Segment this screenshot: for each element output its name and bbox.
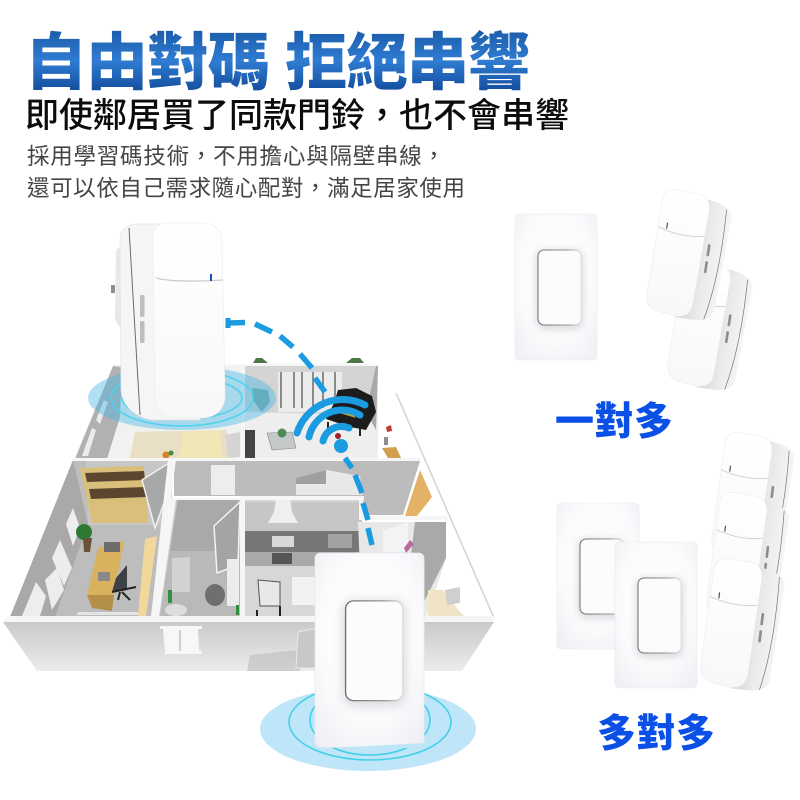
title: 自由對碼 拒絕串響 [25, 29, 530, 98]
many to many: front wall switch [615, 542, 697, 688]
receiver device large [111, 223, 225, 420]
bathroom [150, 498, 241, 617]
kitchen [245, 497, 362, 617]
many to many: top receiver [710, 431, 797, 565]
front exterior wall with window [3, 622, 494, 671]
outer right wall edge [396, 393, 494, 618]
description text: 還可以依自己需求隨心配對，滿足居家使用 [27, 176, 465, 201]
subtitle: 即使鄰居買了同款門鈴，也不會串響 [25, 97, 569, 135]
hallway room [174, 461, 420, 515]
label: one to many: 一對多 [555, 401, 673, 444]
one to many: rear receiver [665, 258, 755, 393]
dashed signal path [228, 318, 372, 545]
piano [326, 388, 376, 430]
study room [10, 460, 172, 617]
plant [76, 524, 92, 540]
chair [112, 565, 127, 592]
living room with piano [245, 366, 378, 458]
plants on the back wall [253, 358, 364, 363]
desk [87, 541, 124, 595]
many to many: middle receiver [705, 491, 792, 625]
teal plant behind ripple [252, 388, 270, 412]
left wall windows [22, 508, 80, 616]
floor plan illustration [3, 358, 494, 671]
one to many: wall switch [515, 214, 597, 360]
open terrace area [382, 425, 401, 458]
many to many: rear wall switch [557, 503, 639, 649]
label: many to many: 多對多 [597, 713, 715, 756]
one to many: front receiver [644, 188, 734, 323]
description text: 採用學習碼技術，不用擔心與隔壁串線， [27, 144, 445, 169]
small room and right side wall [358, 470, 465, 617]
wall poster [405, 470, 432, 516]
interior walls [3, 364, 494, 622]
many to many: bottom receiver [698, 557, 787, 693]
bedroom [74, 366, 241, 459]
ripple under receiver [88, 366, 276, 430]
wall switch large [315, 553, 424, 748]
wifi icon [297, 400, 365, 453]
ripple under wall switch [260, 684, 476, 771]
description text [27, 144, 465, 201]
